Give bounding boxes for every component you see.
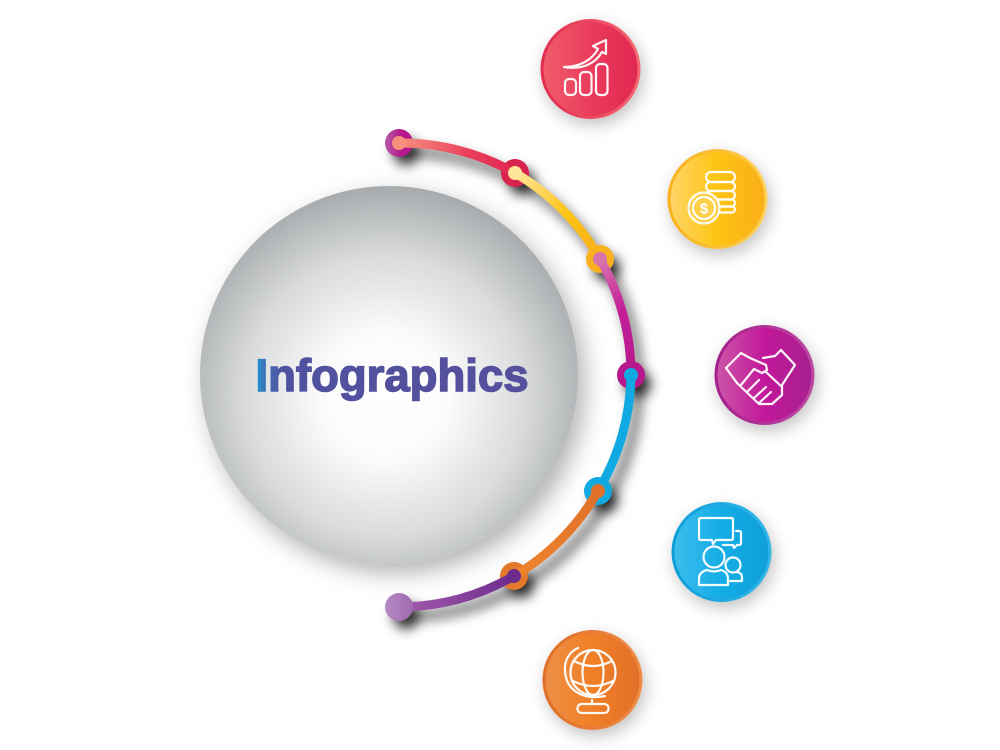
- yellow start cap: [508, 166, 522, 180]
- orange segment: [514, 491, 598, 576]
- arc node 4: [617, 361, 645, 389]
- magenta segment: [600, 259, 631, 375]
- arc node 1: [385, 129, 413, 157]
- red start cap: [392, 136, 406, 150]
- button: handshake: [714, 325, 814, 425]
- icon: globe: [565, 648, 616, 713]
- title: Infographics: [256, 350, 528, 401]
- yellow segment: [515, 173, 600, 259]
- button: people chat: [672, 502, 772, 602]
- blue start cap: [624, 368, 638, 382]
- timeline arc: [385, 129, 645, 621]
- arc node 2: [501, 159, 529, 187]
- red segment: [399, 143, 515, 173]
- icon: people chat: [699, 518, 742, 585]
- arc shadow: [393, 139, 651, 629]
- arc node 7: [385, 593, 413, 621]
- arc node 5: [584, 477, 612, 505]
- button: growth chart: [540, 19, 640, 119]
- purple start cap: [507, 569, 521, 583]
- purple segment: [404, 576, 514, 607]
- central sphere: [200, 186, 578, 564]
- orange start cap: [591, 484, 605, 498]
- icon: handshake: [726, 350, 795, 404]
- arc node 3: [586, 245, 614, 273]
- icon: coins: $: [700, 200, 709, 218]
- icon: growth chart: [564, 40, 608, 95]
- blue segment: [598, 375, 631, 491]
- button: coins: [668, 149, 768, 249]
- arc node 6: [500, 562, 528, 590]
- button: globe: [542, 630, 642, 730]
- magenta start cap: [593, 252, 607, 266]
